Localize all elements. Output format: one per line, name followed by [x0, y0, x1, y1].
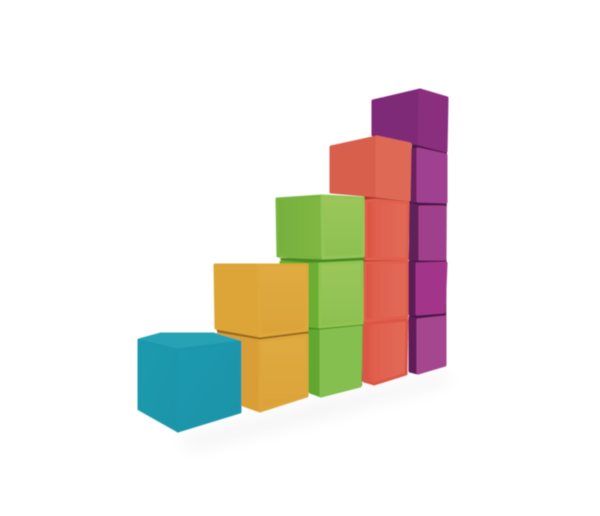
red block 3 [365, 262, 407, 321]
green block 1 (top) [277, 196, 363, 258]
purple column seam backing [409, 140, 447, 374]
ground shadow [170, 372, 452, 450]
teal left face [139, 341, 178, 431]
red column [331, 137, 410, 385]
green column seam backing [280, 257, 364, 397]
purple block 5 (bottom) [410, 317, 445, 373]
green column [277, 196, 364, 397]
yellow column [215, 265, 308, 411]
purple block 3 [410, 205, 445, 259]
purple block 4 [410, 262, 446, 314]
red block 4 (bottom) [364, 320, 407, 384]
purple column [373, 90, 447, 374]
yellow block 1 (top) [215, 265, 307, 336]
yellow column seam backing [216, 328, 308, 342]
green block 3 (bottom) [309, 327, 361, 396]
teal block [139, 334, 240, 431]
red column seam backing [362, 196, 409, 385]
teal top face [139, 334, 240, 350]
teal right face [177, 342, 240, 431]
purple block 2 [412, 149, 446, 202]
red block 1 (top) [331, 137, 410, 200]
yellow block 2 (bottom) [218, 334, 307, 411]
red block 2 [366, 200, 408, 259]
purple block 1 (top) [373, 90, 447, 151]
green block 2 [281, 262, 362, 327]
